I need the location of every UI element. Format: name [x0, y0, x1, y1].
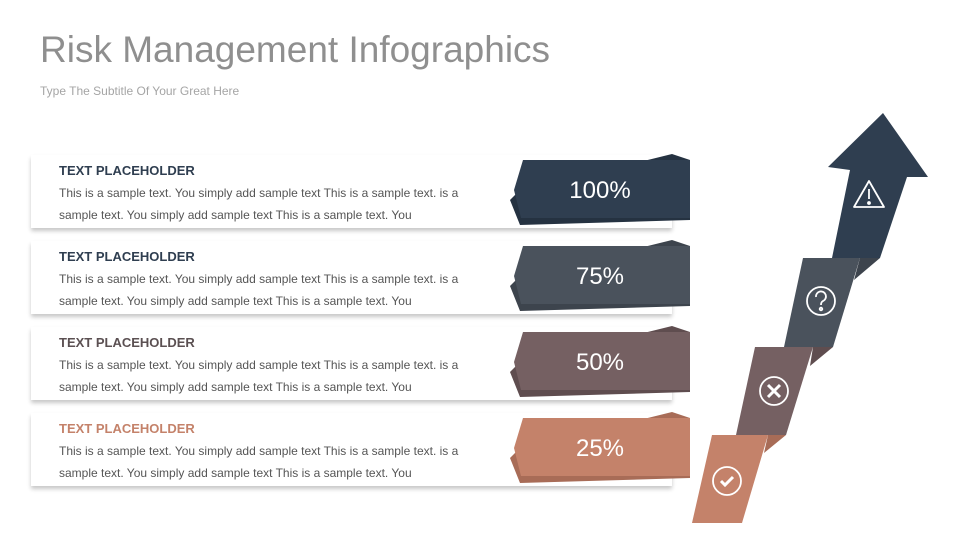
card 3 — [31, 327, 672, 400]
tag 100% — [510, 154, 690, 225]
tag 75%: 75% — [576, 263, 624, 290]
card 2 — [31, 241, 672, 314]
card 4: This is a sample text. You simply add sample text This is a sample text. is a sample text. You simply add sample text This is a sample text. You — [59, 444, 458, 480]
icon: check — [713, 467, 741, 495]
icon: question — [807, 287, 835, 315]
staircase arrow — [692, 113, 928, 523]
tag 50% — [510, 326, 690, 397]
card 4 — [31, 413, 672, 486]
tag 100%: 100% — [569, 177, 631, 204]
card 1: TEXT PLACEHOLDER — [59, 163, 195, 178]
tag 25%: 25% — [576, 435, 624, 462]
card 1 — [31, 155, 672, 228]
card 2: This is a sample text. You simply add sample text This is a sample text. is a sample text. You simply add sample text This is a sample text. You — [59, 272, 458, 308]
title: Risk Management Infographics — [40, 29, 550, 70]
card 4: TEXT PLACEHOLDER — [59, 421, 195, 436]
tag 50%: 50% — [576, 349, 624, 376]
icon: warning — [854, 181, 884, 207]
card 3: TEXT PLACEHOLDER — [59, 335, 195, 350]
icon: cross — [760, 377, 788, 405]
tag 75% — [510, 240, 690, 311]
subtitle: Type The Subtitle Of Your Great Here — [40, 84, 239, 98]
card 2: TEXT PLACEHOLDER — [59, 249, 195, 264]
card 1: This is a sample text. You simply add sample text This is a sample text. is a sample text. You simply add sample text This is a sample text. You — [59, 186, 458, 222]
tag 25% — [510, 412, 690, 483]
card 3: This is a sample text. You simply add sample text This is a sample text. is a sample text. You simply add sample text This is a sample text. You — [59, 358, 458, 394]
